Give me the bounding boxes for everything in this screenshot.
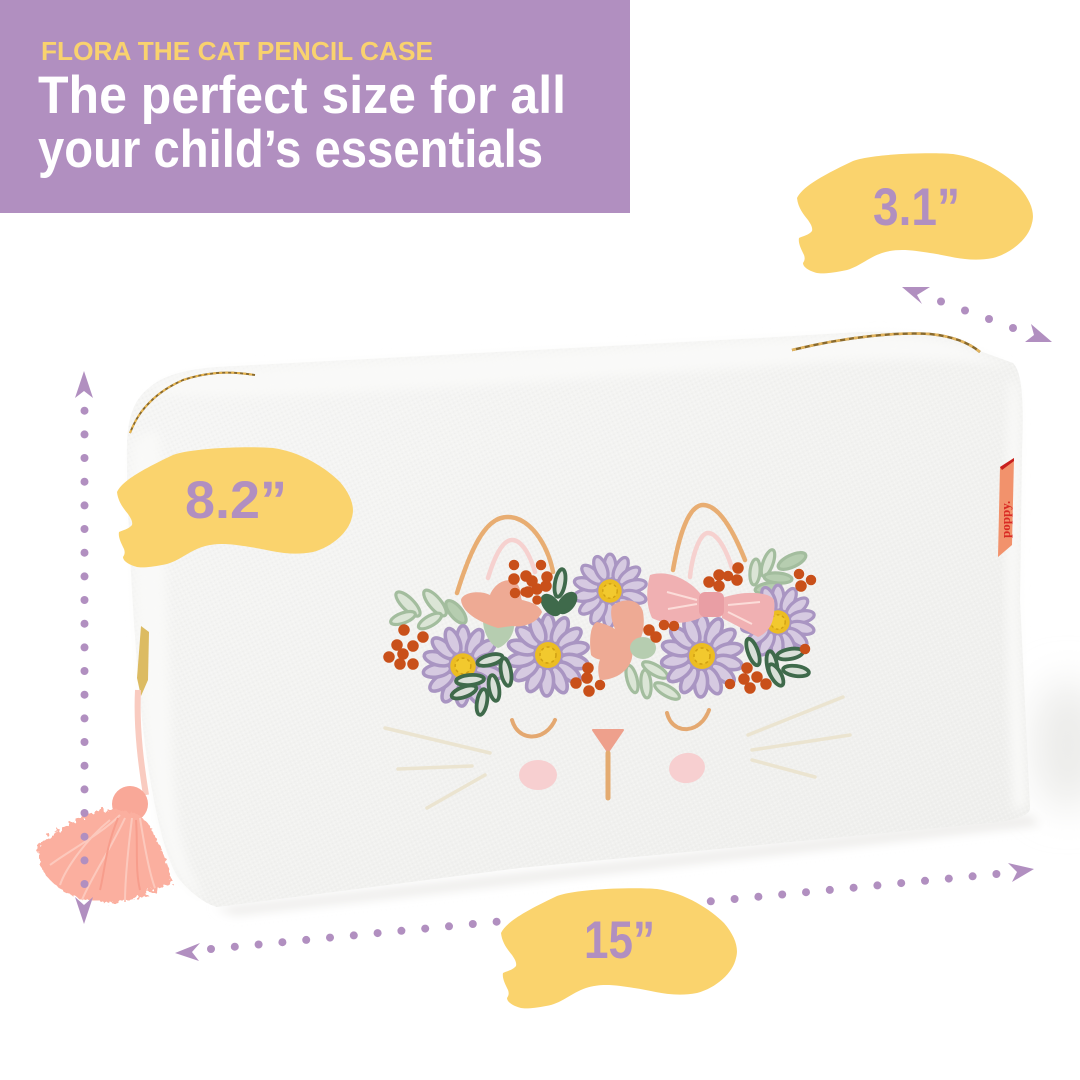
nose and mouth bbox=[593, 730, 623, 798]
depth measurement arrow bbox=[902, 287, 1052, 342]
whiskers bbox=[385, 697, 850, 808]
zipper left bbox=[130, 373, 255, 433]
salmon flowers bbox=[461, 580, 644, 680]
orange berries bbox=[384, 560, 816, 696]
callout: height 8.2 bbox=[117, 447, 353, 567]
right end highlight bbox=[1007, 379, 1027, 812]
top panel highlight bbox=[150, 334, 1010, 396]
flowers bbox=[422, 554, 815, 706]
dark green leaves bbox=[450, 568, 810, 716]
calyx middle bbox=[630, 637, 656, 659]
zipper right bbox=[792, 334, 980, 352]
cheeks bbox=[519, 750, 707, 790]
height measurement arrow bbox=[75, 371, 93, 924]
brand tag: poppy. bbox=[998, 501, 1013, 538]
eyebrow: FLORA THE CAT PENCIL CASE bbox=[41, 36, 433, 66]
pink bow bbox=[647, 573, 774, 637]
callout: width 15: 15” bbox=[584, 911, 655, 970]
ground shadow bbox=[215, 680, 1080, 915]
callout: depth 3.1 bbox=[797, 153, 1033, 273]
brand tag bbox=[998, 458, 1014, 557]
sage leaves bbox=[389, 548, 808, 702]
zipper pull and tassel bbox=[38, 626, 172, 903]
pencil case bag bbox=[127, 332, 1030, 907]
title: The perfect size for all bbox=[38, 66, 566, 125]
calyx bbox=[483, 620, 514, 648]
title: your child’s essentials bbox=[38, 120, 543, 179]
left end highlight bbox=[132, 431, 205, 900]
header banner bbox=[0, 0, 630, 213]
eyes bbox=[512, 710, 709, 736]
callout: height 8.2: 8.2” bbox=[185, 471, 287, 530]
bag body bbox=[127, 332, 1030, 907]
callout: depth 3.1: 3.1” bbox=[873, 178, 960, 237]
fabric weave bbox=[127, 332, 1030, 907]
embroidered cat face bbox=[384, 505, 850, 808]
ears bbox=[457, 505, 745, 593]
callout: width 15 bbox=[501, 888, 737, 1008]
width measurement arrow bbox=[175, 863, 1034, 961]
